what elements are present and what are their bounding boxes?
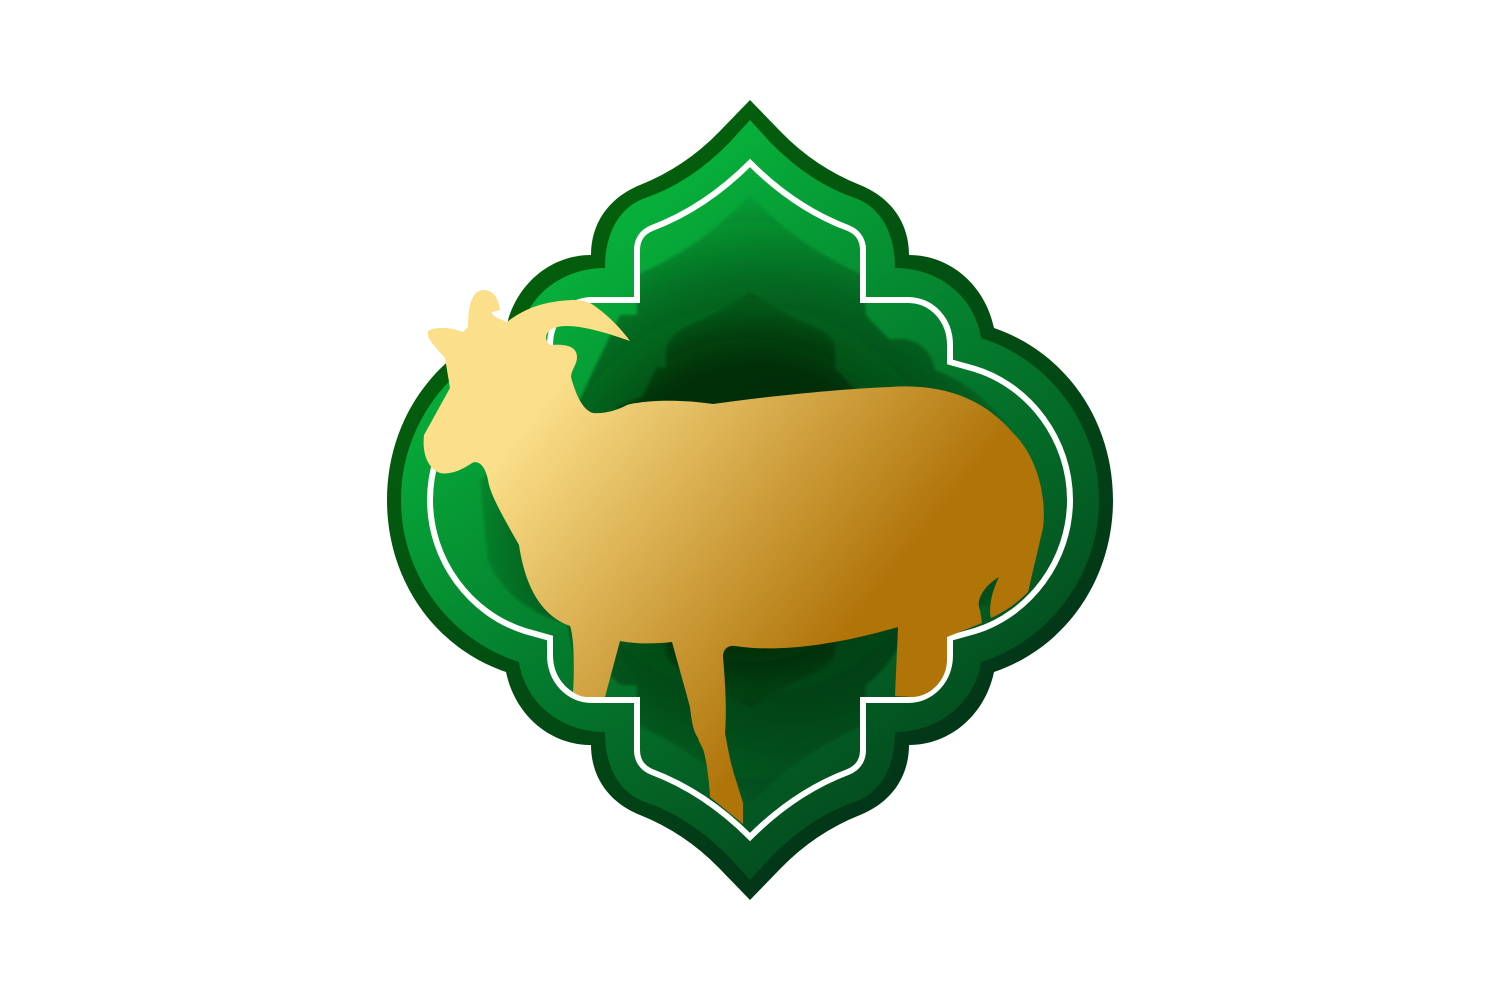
mid shadow layer bbox=[480, 195, 1030, 805]
outer dark green frame bbox=[387, 100, 1113, 900]
white outline bbox=[430, 163, 1070, 837]
inner panel with stepped dark layers bbox=[480, 195, 1030, 805]
goat silhouette bbox=[424, 290, 1044, 824]
dark core layer bbox=[617, 292, 860, 708]
emblem: goat on green ornamental badge bbox=[387, 100, 1113, 900]
middle green frame bbox=[401, 120, 1099, 880]
